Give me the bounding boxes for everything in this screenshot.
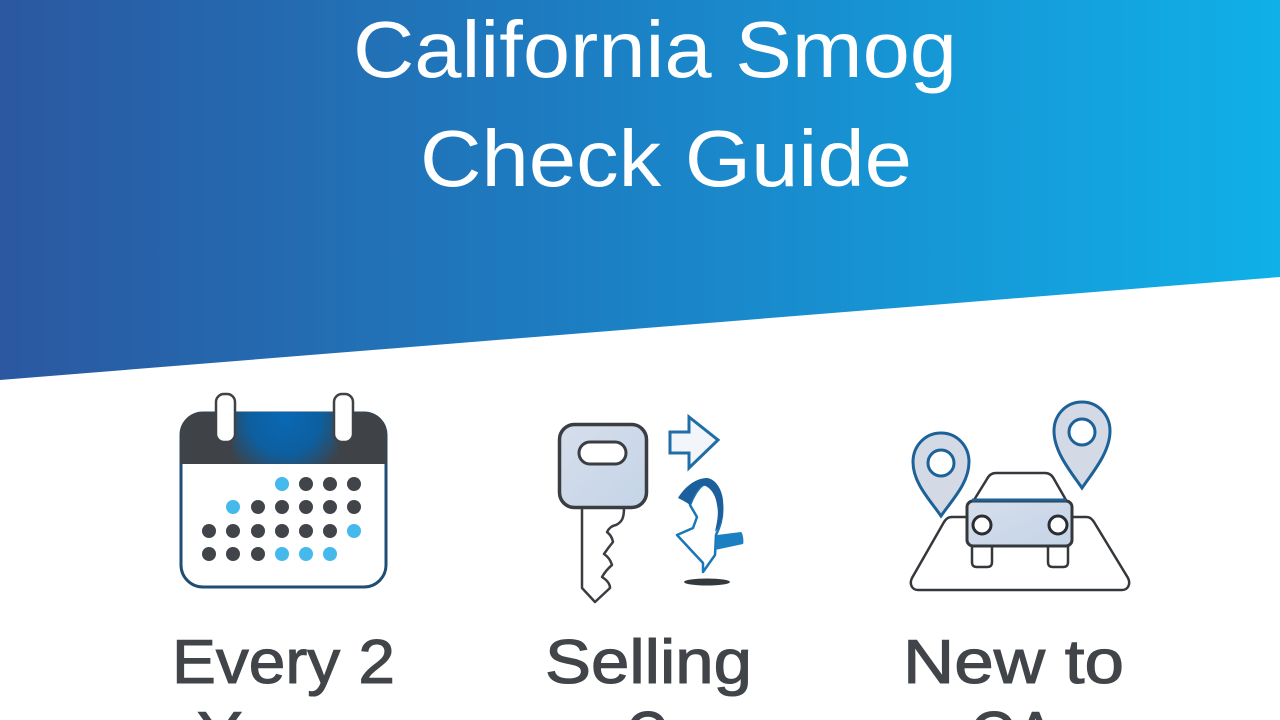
- right pin: [1054, 402, 1110, 488]
- icon: handover hand: [677, 478, 743, 586]
- icon: arrow: [670, 417, 718, 468]
- road: [911, 517, 1129, 590]
- icon: car with location pins: [911, 402, 1129, 590]
- label: every 2 years: Every 2: [172, 628, 395, 697]
- car body: [967, 501, 1072, 546]
- label: selling a car: [545, 628, 752, 720]
- title: [353, 5, 957, 203]
- banner: [0, 0, 1280, 380]
- car wheels: [972, 546, 1068, 567]
- title: California Smog: [353, 5, 957, 94]
- label: selling a car: Selling: [545, 628, 752, 697]
- left pin: [913, 433, 969, 516]
- title: Check Guide: [420, 114, 912, 203]
- label: new to ca: New to: [903, 628, 1124, 697]
- car roof: [974, 473, 1066, 500]
- icon: calendar: [180, 394, 387, 587]
- label: new to ca: [903, 628, 1124, 720]
- icon: car key: [560, 424, 646, 602]
